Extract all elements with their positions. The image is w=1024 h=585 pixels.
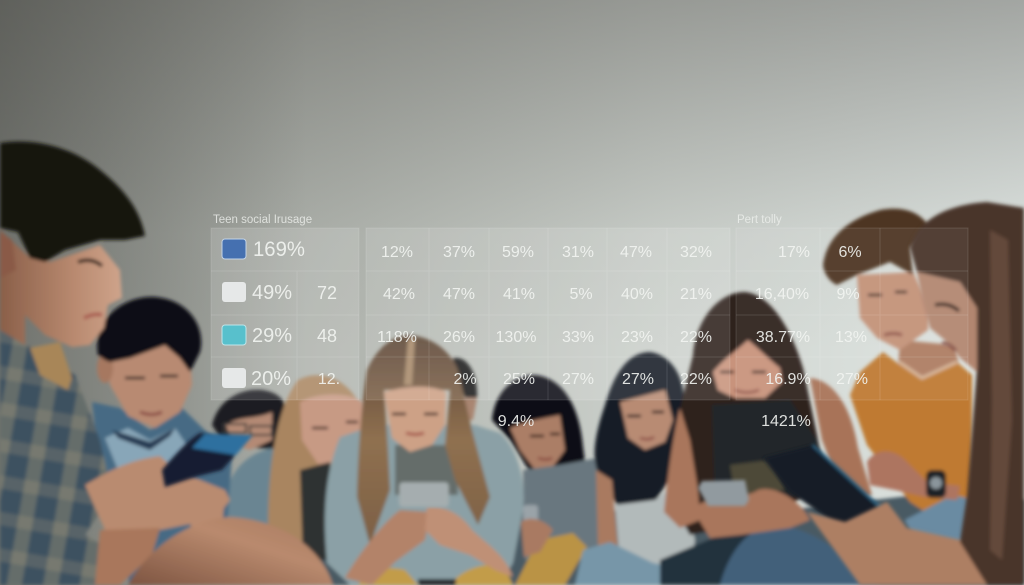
person: blonde girl	[222, 375, 364, 560]
total value: right: 1421%	[761, 413, 811, 430]
middle table values: 27%	[562, 371, 594, 388]
middle table values: 40%	[621, 286, 653, 303]
legend swatch: blue	[222, 239, 246, 259]
right table values: 38.77%	[756, 329, 810, 346]
left table values: 48	[317, 326, 337, 346]
right table values: 9%	[836, 286, 860, 303]
person: right girl with hand	[807, 202, 1024, 585]
left table values: 20%	[251, 368, 291, 390]
person: foreground boy	[0, 141, 333, 585]
middle table values: 118%	[377, 329, 417, 346]
right table values: 16,40%	[755, 286, 809, 303]
person: girl with dark blue hair	[595, 352, 695, 570]
person: girl with long brown hair on right	[575, 292, 880, 585]
phone: centre girl phone	[399, 482, 449, 507]
person: girl with glasses	[212, 390, 285, 450]
middle table values: 2%	[453, 371, 477, 388]
person: boy in orange shirt	[823, 209, 975, 560]
middle table values: 37%	[443, 244, 475, 261]
middle table values: 27%	[622, 371, 654, 388]
middle table values: 5%	[569, 286, 593, 303]
panel: right table	[736, 228, 968, 400]
left table values: 49%	[252, 282, 292, 304]
middle table values: 23%	[621, 329, 653, 346]
middle table values: 31%	[562, 244, 594, 261]
middle table values: 26%	[443, 329, 475, 346]
middle table values: 47%	[443, 286, 475, 303]
right table values: 13%	[835, 329, 867, 346]
left table values: 12.	[318, 371, 340, 388]
right table values: 16.9%	[765, 371, 811, 388]
middle table values: 25%	[503, 371, 535, 388]
middle table values: 22%	[680, 371, 712, 388]
middle table values: 41%	[503, 286, 535, 303]
left table values	[251, 237, 340, 390]
legend swatch: white	[222, 282, 246, 302]
right table values: 27%	[836, 371, 868, 388]
middle table values: 22%	[680, 329, 712, 346]
middle table values: 12%	[381, 244, 413, 261]
total value: left: 9.4%	[498, 413, 534, 430]
panel: left table	[211, 228, 359, 400]
person: boy in second row	[92, 297, 232, 585]
panel: middle table	[366, 228, 730, 400]
person: boy behind centre	[453, 358, 477, 420]
person: centre girl	[325, 335, 524, 585]
middle table values: 32%	[680, 244, 712, 261]
data table overlay	[211, 214, 968, 430]
left table values: 169%	[253, 237, 305, 261]
middle table values: 130%	[496, 329, 536, 346]
middle table values: 47%	[620, 244, 652, 261]
heading: left table title: Teen social Irusage	[213, 214, 312, 226]
middle table values: 33%	[562, 329, 594, 346]
heading: right table title: Pert tolly	[737, 214, 782, 226]
right table values	[755, 244, 868, 388]
person: girl in black hair	[492, 375, 600, 585]
right table values: 17%	[778, 244, 810, 261]
floor shadow behind group	[210, 490, 1024, 585]
middle table values: 42%	[383, 286, 415, 303]
phone: right girl phone	[698, 480, 749, 506]
middle table values: 21%	[680, 286, 712, 303]
left table values: 29%	[252, 325, 292, 347]
people photo	[0, 141, 1024, 585]
middle table values: 59%	[502, 244, 534, 261]
left table values: 72	[317, 283, 337, 303]
right table values: 6%	[838, 244, 862, 261]
legend swatch: teal	[222, 325, 246, 345]
middle table values	[377, 244, 712, 388]
phone: boy phone	[162, 433, 253, 487]
legend swatch: light	[222, 368, 246, 388]
tablet: foreground	[763, 445, 905, 538]
